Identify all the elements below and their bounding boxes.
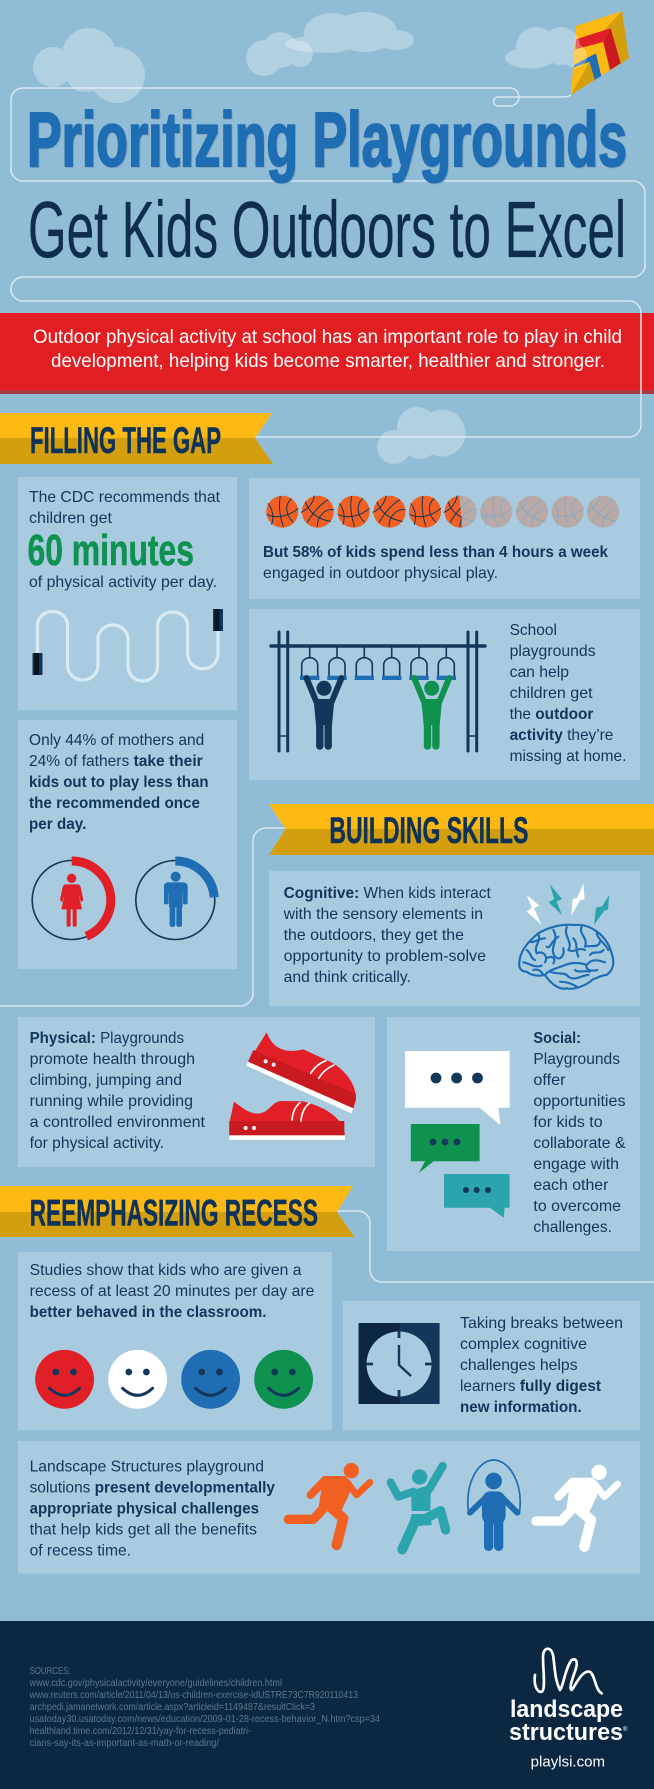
icon: basketballs bbox=[266, 496, 619, 528]
sources: www.cdc.gov/physicalactivity/everyone/guidelines/children.html bbox=[29, 1677, 282, 1689]
panel: parents: per day. bbox=[29, 816, 86, 833]
sources: www.reuters.com/article/2011/04/13/us-children-exercise-idUSTRE73C7R920110413 bbox=[29, 1689, 358, 1701]
cloud: by kite bbox=[505, 27, 587, 68]
panel: landscape structures solutions: Landscape Structures playground bbox=[30, 1459, 264, 1476]
panel: physical: Physical: Playgrounds bbox=[30, 1030, 184, 1047]
panel: social: Playgrounds bbox=[533, 1051, 620, 1068]
panel: CDC recommendation: children get bbox=[29, 510, 113, 527]
icon: brain with lightning bbox=[519, 884, 613, 989]
intro text bbox=[33, 326, 622, 372]
panel: recess behaviour: recess of at least 20 minutes per day are bbox=[30, 1283, 314, 1300]
icon: white runner bbox=[536, 1465, 618, 1547]
logo: landscape structures: ® bbox=[623, 1726, 628, 1733]
panel: social: collaborate & bbox=[533, 1135, 626, 1152]
panel: basketball statistic: But 58% of kids spend less than 4 hours a week bbox=[263, 544, 608, 561]
logo: landscape structures bbox=[509, 1649, 628, 1771]
logo: landscape structures: structures bbox=[509, 1719, 623, 1746]
panel: social: for kids to bbox=[533, 1114, 603, 1131]
panel: parents bbox=[18, 720, 237, 969]
panel: social: opportunities bbox=[533, 1093, 626, 1110]
sources: healthland.time.com/2012/12/31/yay-for-recess-pediatri- bbox=[30, 1725, 251, 1737]
panel: cognitive: and think critically. bbox=[284, 969, 411, 986]
panel: social: each other bbox=[533, 1177, 609, 1194]
panel: school playgrounds: missing at home. bbox=[510, 748, 626, 765]
footer bbox=[0, 1621, 654, 1789]
panel: social: challenges. bbox=[533, 1219, 612, 1236]
panel: landscape structures solutions: appropriate physical challenges bbox=[30, 1501, 259, 1518]
panel: school playgrounds bbox=[249, 609, 640, 780]
intro band bbox=[0, 313, 654, 394]
icon: white smiley bbox=[108, 1350, 167, 1409]
panel: cognitive: opportunity to problem-solve bbox=[284, 948, 486, 965]
panel: parents: kids out to play less than bbox=[29, 774, 208, 791]
chart: fathers 24% ring bbox=[136, 860, 215, 940]
panel: school playgrounds: School bbox=[510, 622, 557, 639]
panel: recess behaviour bbox=[18, 1252, 332, 1430]
intro text: Outdoor physical activity at school has an important role to play in child bbox=[33, 326, 622, 348]
icon: green speech bubble bbox=[411, 1124, 480, 1173]
panel: cognitive: the outdoors, they get the bbox=[284, 927, 464, 944]
panel: taking breaks bbox=[343, 1301, 640, 1430]
panel: taking breaks: Taking breaks between bbox=[460, 1315, 623, 1332]
panel: physical: a controlled environment bbox=[30, 1114, 206, 1131]
icon: blue smiley bbox=[181, 1350, 240, 1409]
logo: landscape structures: landscape bbox=[510, 1696, 623, 1723]
banner: filling the gap: FILLING THE GAP bbox=[30, 420, 221, 461]
panel: social: offer bbox=[533, 1072, 566, 1089]
icon: blue rope jumper bbox=[468, 1460, 520, 1546]
panel: CDC recommendation bbox=[18, 477, 237, 710]
icon: monkey bars bbox=[271, 632, 485, 751]
icon: green smiley bbox=[254, 1350, 313, 1409]
panel: taking breaks: learners fully digest bbox=[460, 1378, 602, 1395]
panel: school playgrounds: activity they’re bbox=[510, 727, 613, 744]
panel: school playgrounds: playgrounds bbox=[510, 643, 596, 660]
panel: CDC recommendation: of physical activity per day. bbox=[29, 574, 217, 591]
banner: building skills: BUILDING SKILLS bbox=[329, 810, 528, 851]
panel: landscape structures solutions bbox=[18, 1441, 640, 1574]
stat: 60 minutes: 60 minutes bbox=[28, 526, 194, 575]
banner: filling the gap bbox=[0, 413, 273, 464]
banner: reemphasizing recess: REEMPHASIZING RECESS bbox=[30, 1193, 318, 1234]
sources: SOURCES: bbox=[30, 1665, 71, 1677]
icon: white speech bubble bbox=[405, 1051, 510, 1125]
panel: cognitive bbox=[269, 871, 640, 1006]
icon: orange runner bbox=[288, 1463, 370, 1545]
panel: landscape structures solutions: that help kids get all the benefits bbox=[30, 1522, 257, 1539]
panel: physical: promote health through bbox=[30, 1051, 195, 1068]
connector line to building skills bbox=[0, 828, 286, 1006]
chart: mothers 44% ring bbox=[32, 860, 111, 940]
icon: kite bbox=[571, 11, 629, 95]
panel: social: to overcome bbox=[533, 1198, 621, 1215]
panel: school playgrounds: children get bbox=[510, 685, 593, 702]
panel: recess behaviour: Studies show that kids who are given a bbox=[30, 1262, 302, 1279]
sources: usatoday30.usatoday.com/news/education/2009-01-28-recess-behavior_N.htm?csp=34 bbox=[30, 1713, 380, 1725]
panel: physical: for physical activity. bbox=[30, 1135, 164, 1152]
icon: clock bbox=[359, 1323, 440, 1404]
panel: parents: 24% of fathers take their bbox=[29, 753, 203, 770]
kite string bbox=[11, 88, 645, 437]
panel: physical bbox=[18, 1017, 375, 1167]
cloud: section one bbox=[377, 407, 466, 464]
cloud: centre right bbox=[285, 12, 414, 53]
panel: landscape structures solutions: of recess time. bbox=[30, 1543, 131, 1560]
panel: school playgrounds: the outdoor bbox=[510, 706, 593, 723]
icon: red smiley bbox=[35, 1350, 94, 1409]
panel: CDC recommendation: The CDC recommends that bbox=[29, 489, 221, 506]
panel: school playgrounds: can help bbox=[510, 664, 569, 681]
panel: social: engage with bbox=[533, 1156, 619, 1173]
panel: social bbox=[387, 1017, 640, 1251]
panel: social: Social: bbox=[533, 1030, 581, 1047]
sources bbox=[29, 1665, 380, 1749]
panel: recess behaviour: better behaved in the classroom. bbox=[30, 1304, 266, 1321]
logo: landscape structures: playlsi.com bbox=[531, 1754, 605, 1771]
icon: red sneakers bbox=[229, 1032, 356, 1140]
panel: taking breaks: challenges helps bbox=[460, 1357, 578, 1374]
cloud: left bbox=[33, 28, 145, 103]
panel: basketball statistic bbox=[249, 478, 640, 599]
cloud: centre left bbox=[246, 32, 313, 76]
banner: reemphasizing recess bbox=[0, 1186, 354, 1237]
panel: basketball statistic: engaged in outdoor physical play. bbox=[263, 565, 498, 582]
banner: building skills bbox=[269, 804, 654, 855]
intro text: development, helping kids become smarter, healthier and stronger. bbox=[51, 350, 605, 372]
panel: cognitive: with the sensory elements in bbox=[283, 906, 483, 923]
panel: cognitive: Cognitive: When kids interact bbox=[284, 885, 491, 902]
panel: physical: climbing, jumping and bbox=[30, 1072, 182, 1089]
icon: teal climber bbox=[391, 1466, 446, 1549]
panel: parents: Only 44% of mothers and bbox=[29, 732, 204, 749]
connector line from reemphasizing recess bbox=[337, 1211, 654, 1282]
panel: landscape structures solutions: solutions present developmentally bbox=[30, 1480, 275, 1497]
icon: jump rope bbox=[32, 609, 223, 681]
sources: cians-say-its-as-important-as-math-or-reading/ bbox=[30, 1737, 219, 1749]
panel: parents: the recommended once bbox=[29, 795, 200, 812]
panel: taking breaks: complex cognitive bbox=[460, 1336, 587, 1353]
panel: taking breaks: new information. bbox=[460, 1399, 582, 1416]
panel: physical: running while providing bbox=[30, 1093, 193, 1110]
sources: archpedi.jamanetwork.com/article.aspx?articleid=1149487&resultClick=3 bbox=[30, 1701, 315, 1713]
icon: teal speech bubble bbox=[444, 1174, 510, 1218]
